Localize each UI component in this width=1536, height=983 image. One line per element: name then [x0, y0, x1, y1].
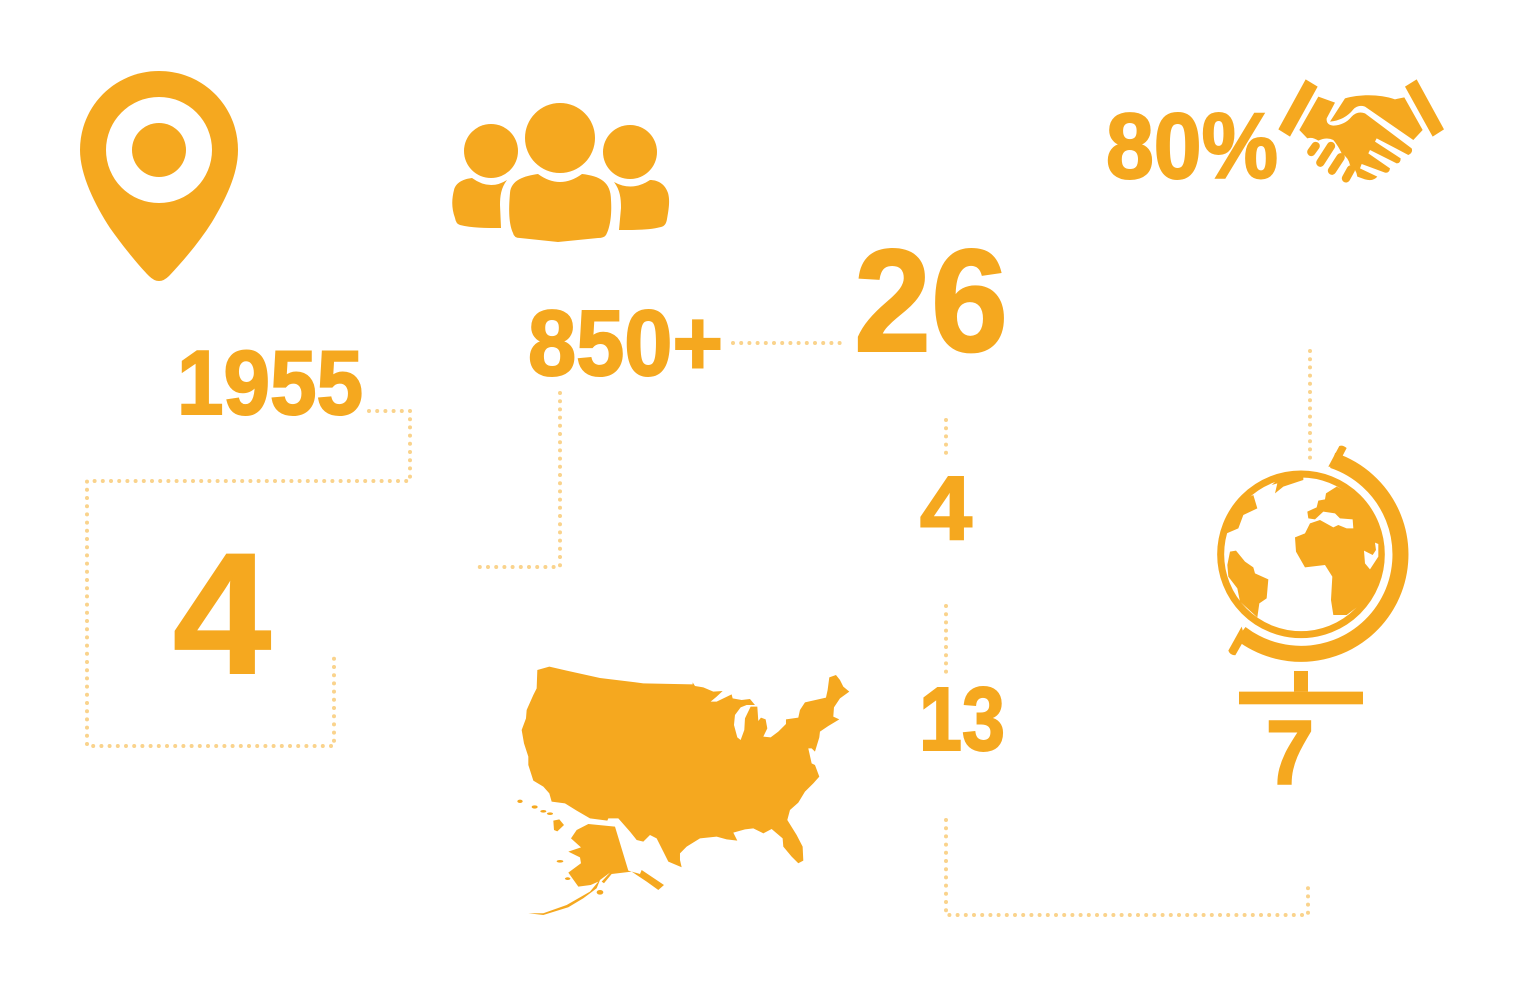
map: United States [517, 667, 849, 915]
dotted connector: small 4 to 13 [944, 606, 948, 672]
dotted connector: 13 to globe [946, 820, 1308, 915]
icon: handshake [1278, 79, 1444, 180]
icon: group of people [452, 103, 669, 242]
mainland [522, 667, 849, 867]
icon: globe on stand [1221, 446, 1400, 704]
dotted connector: 26 to globe [1308, 351, 1312, 460]
dotted connector: 850+ to map [478, 393, 560, 567]
axis pegs [1328, 446, 1347, 467]
Alaska [528, 824, 664, 915]
globe outline [1221, 474, 1381, 635]
dotted connector: 26 to small 4 [944, 420, 948, 458]
stat: 26: 26 [854, 219, 1008, 382]
stand base [1239, 692, 1363, 704]
Hawaii and nearby islands [553, 819, 564, 831]
stat: 7: 7 [1266, 703, 1314, 804]
globe arm [1241, 460, 1400, 654]
stat: large 4: 4 [173, 518, 271, 710]
dotted connector: 850+ to 26 [733, 341, 846, 345]
stat: small 4: 4 [920, 459, 972, 559]
stat: 13: 13 [919, 670, 1005, 770]
stat: 850+: 850+ [528, 291, 723, 395]
dotted connector: 1955 to large 4 [87, 411, 410, 746]
stat: 1955: 1955 [177, 333, 363, 434]
icon: location pin [80, 71, 238, 281]
continents [1224, 495, 1257, 533]
stat: 80%: 80% [1106, 94, 1278, 198]
